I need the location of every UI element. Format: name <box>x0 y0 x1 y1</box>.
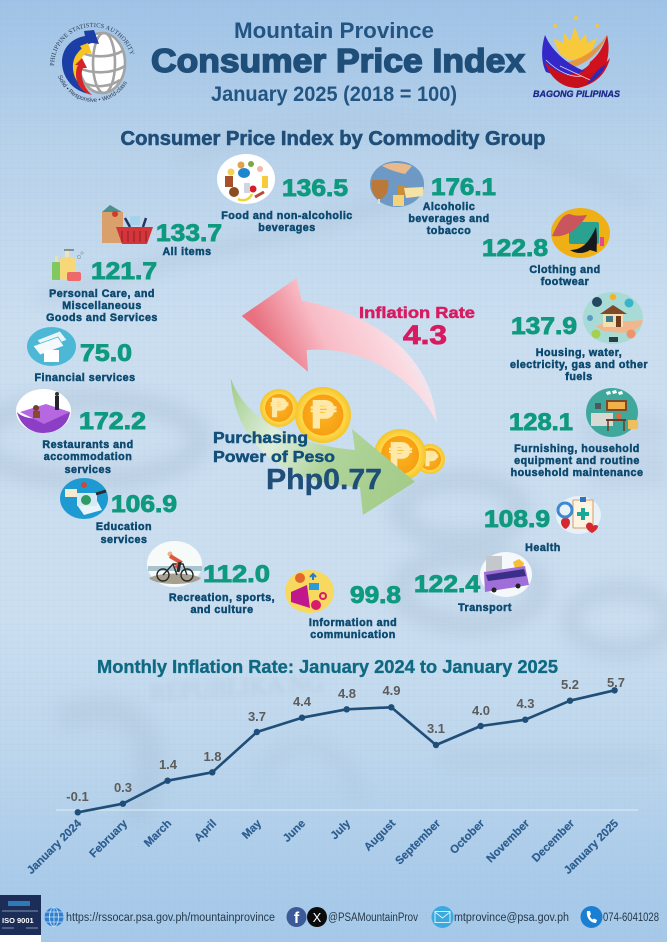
social handle: @PSAMountainProv <box>328 912 418 924</box>
item: recreation <box>147 541 275 616</box>
value: 75.0 <box>80 340 132 367</box>
main heading: Consumer Price Index <box>151 42 526 79</box>
inflation rate <box>359 305 475 350</box>
logo ring text <box>50 22 134 102</box>
icon: living room <box>586 388 638 437</box>
icon: X: X <box>313 910 322 925</box>
data labels: 0.3 <box>114 780 132 795</box>
ISO 9001 badge <box>0 895 41 942</box>
logo name: BAGONG PILIPINAS <box>533 89 620 99</box>
data labels: 1.8 <box>203 749 222 764</box>
purchasing power of peso <box>213 430 382 496</box>
icon: alcohol and tobacco <box>370 161 424 207</box>
globe <box>79 33 125 93</box>
PSA logo <box>50 22 134 102</box>
label: electricity, gas and other <box>510 359 648 371</box>
item: alcoholic beverages and tobacco <box>370 161 496 237</box>
value: 112.0 <box>203 561 270 588</box>
label: services <box>65 464 111 476</box>
label: services <box>101 534 147 546</box>
icon: phone <box>580 906 602 928</box>
section heading: monthly inflation: Monthly Inflation Rate: January 2024 to January 2025 <box>97 657 558 677</box>
logo ring text: Solid • Responsive • World-class <box>58 75 127 102</box>
label: Furnishing, household <box>514 443 640 455</box>
label: tobacco <box>427 225 471 237</box>
inflation rate: Inflation Rate <box>359 305 475 322</box>
icon: megaphone <box>285 570 334 613</box>
value: 136.5 <box>282 175 348 202</box>
month labels: December <box>530 817 578 865</box>
value: 176.1 <box>431 174 496 201</box>
data labels: 5.7 <box>607 675 625 690</box>
label: beverages <box>258 222 316 234</box>
value: 122.4 <box>414 571 481 598</box>
label: footwear <box>541 276 589 288</box>
month labels: February <box>87 817 131 860</box>
item: education <box>60 478 177 546</box>
website: https://rssocar.psa.gov.ph/mountainprovince <box>66 912 275 924</box>
purchasing power of peso: Php0.77 <box>266 464 382 496</box>
value: 122.8 <box>482 235 548 262</box>
data labels <box>66 675 625 804</box>
data labels: 4.3 <box>516 696 535 711</box>
label: Personal Care, and <box>49 288 155 300</box>
coins: ₱ <box>424 447 438 471</box>
icon: cyclist <box>147 541 202 587</box>
month labels <box>25 817 621 877</box>
data labels: 4.9 <box>382 683 401 698</box>
value: 106.9 <box>111 491 177 518</box>
item: food and non-alcoholic beverages <box>217 154 353 234</box>
value: 172.2 <box>79 408 146 435</box>
item: personal care <box>46 250 158 324</box>
item: clothing and footwear <box>482 208 610 288</box>
icon: bus <box>480 552 532 597</box>
flag emblem <box>542 16 610 88</box>
value: 128.1 <box>509 409 573 436</box>
coins: ₱ <box>270 394 289 424</box>
purchasing power of peso: Power of Peso <box>213 449 335 466</box>
month labels: June <box>281 818 308 845</box>
icon: shopping basket <box>102 205 153 244</box>
label: Education <box>96 521 152 533</box>
value: 137.9 <box>511 313 577 340</box>
label: accommodation <box>44 451 132 463</box>
value: 121.7 <box>91 258 157 285</box>
label: fuels <box>565 371 593 383</box>
label: communication <box>310 629 396 641</box>
data labels: -0.1 <box>66 789 89 804</box>
label: Information and <box>309 617 397 629</box>
item: financial services <box>27 327 136 384</box>
email address: mtprovince@psa.gov.ph <box>454 912 569 924</box>
icon: mail <box>432 906 454 928</box>
month labels: January 2025 <box>562 818 621 877</box>
label: Financial services <box>34 372 136 384</box>
item: transport <box>414 552 532 614</box>
icon: globe <box>44 908 64 926</box>
coins: ₱ <box>310 393 337 437</box>
icon: X <box>307 907 327 927</box>
icon: health <box>556 496 601 534</box>
value: 99.8 <box>350 582 401 609</box>
month labels: April <box>192 818 219 844</box>
data labels: 1.4 <box>159 757 178 772</box>
label: Food and non-alcoholic <box>221 210 353 222</box>
label: and culture <box>190 604 254 616</box>
label: Clothing and <box>529 264 601 276</box>
icon: facebook <box>286 907 306 927</box>
label: Goods and Services <box>46 312 158 324</box>
value: 133.7 <box>156 220 222 247</box>
footer contact bar <box>0 895 659 942</box>
data labels: 5.2 <box>561 677 579 692</box>
ISO 9001 badge: ISO 9001 <box>2 916 34 925</box>
label: Miscellaneous <box>62 300 142 312</box>
item: furnishing <box>509 388 643 479</box>
purchasing power of peso: Purchasing <box>213 430 308 447</box>
label: Housing, water, <box>536 347 622 359</box>
label: beverages and <box>408 213 490 225</box>
data labels: 4.8 <box>338 686 356 701</box>
data labels: 3.7 <box>248 709 266 724</box>
central graphic: inflation and purchasing power <box>213 278 475 515</box>
label: All items <box>162 246 212 258</box>
coins: ₱ <box>388 436 412 476</box>
inflation rate: 4.3 <box>403 320 447 350</box>
green arrow <box>231 378 415 515</box>
title <box>151 18 526 106</box>
label: Health <box>525 542 561 554</box>
background: REPUBLIKA NG <box>149 671 324 706</box>
label: Recreation, sports, <box>169 592 275 604</box>
blue, yellow, red arrows <box>62 30 99 95</box>
icon: cards <box>27 327 76 366</box>
icon: education <box>60 478 108 519</box>
data labels: 3.1 <box>427 721 445 736</box>
coins <box>260 387 445 481</box>
month labels: July <box>329 817 354 842</box>
icon: restaurant <box>16 389 71 433</box>
item: housing <box>510 292 648 383</box>
item: all items <box>102 205 222 258</box>
pink arrow <box>242 278 437 423</box>
section heading: commodity group: Consumer Price Index by Commodity Group <box>120 128 546 150</box>
month labels: May <box>240 817 265 842</box>
icon: facebook: f <box>294 910 300 927</box>
month labels: October <box>448 817 488 857</box>
line chart <box>25 675 638 877</box>
icon: hat and shoes <box>551 208 610 258</box>
trend line <box>75 687 618 816</box>
label: Alcoholic <box>423 201 475 213</box>
month labels: January 2024 <box>25 817 85 877</box>
item: information and communication <box>285 570 401 641</box>
month labels: August <box>362 817 398 854</box>
icon: food <box>217 154 275 204</box>
item: restaurants and accommodation <box>16 389 146 476</box>
item: health <box>484 496 601 554</box>
data labels: 4.4 <box>293 694 312 709</box>
icon: house <box>583 292 643 344</box>
province name: Mountain Province <box>234 18 434 43</box>
logo ring text: PHILIPPINE STATISTICS AUTHORITY <box>50 22 134 66</box>
label: equipment and routine <box>514 455 640 467</box>
value: 108.9 <box>484 506 550 533</box>
month labels: September <box>393 817 444 867</box>
Bagong Pilipinas logo <box>533 16 620 99</box>
month labels: November <box>485 817 533 865</box>
label: Transport <box>458 602 512 614</box>
icon: personal care products <box>52 250 83 281</box>
label: Restaurants and <box>42 439 134 451</box>
month labels: March <box>142 818 174 850</box>
label: household maintenance <box>511 467 643 479</box>
data labels: 4.0 <box>472 703 490 718</box>
reference period: January 2025 (2018 = 100) <box>211 83 457 106</box>
